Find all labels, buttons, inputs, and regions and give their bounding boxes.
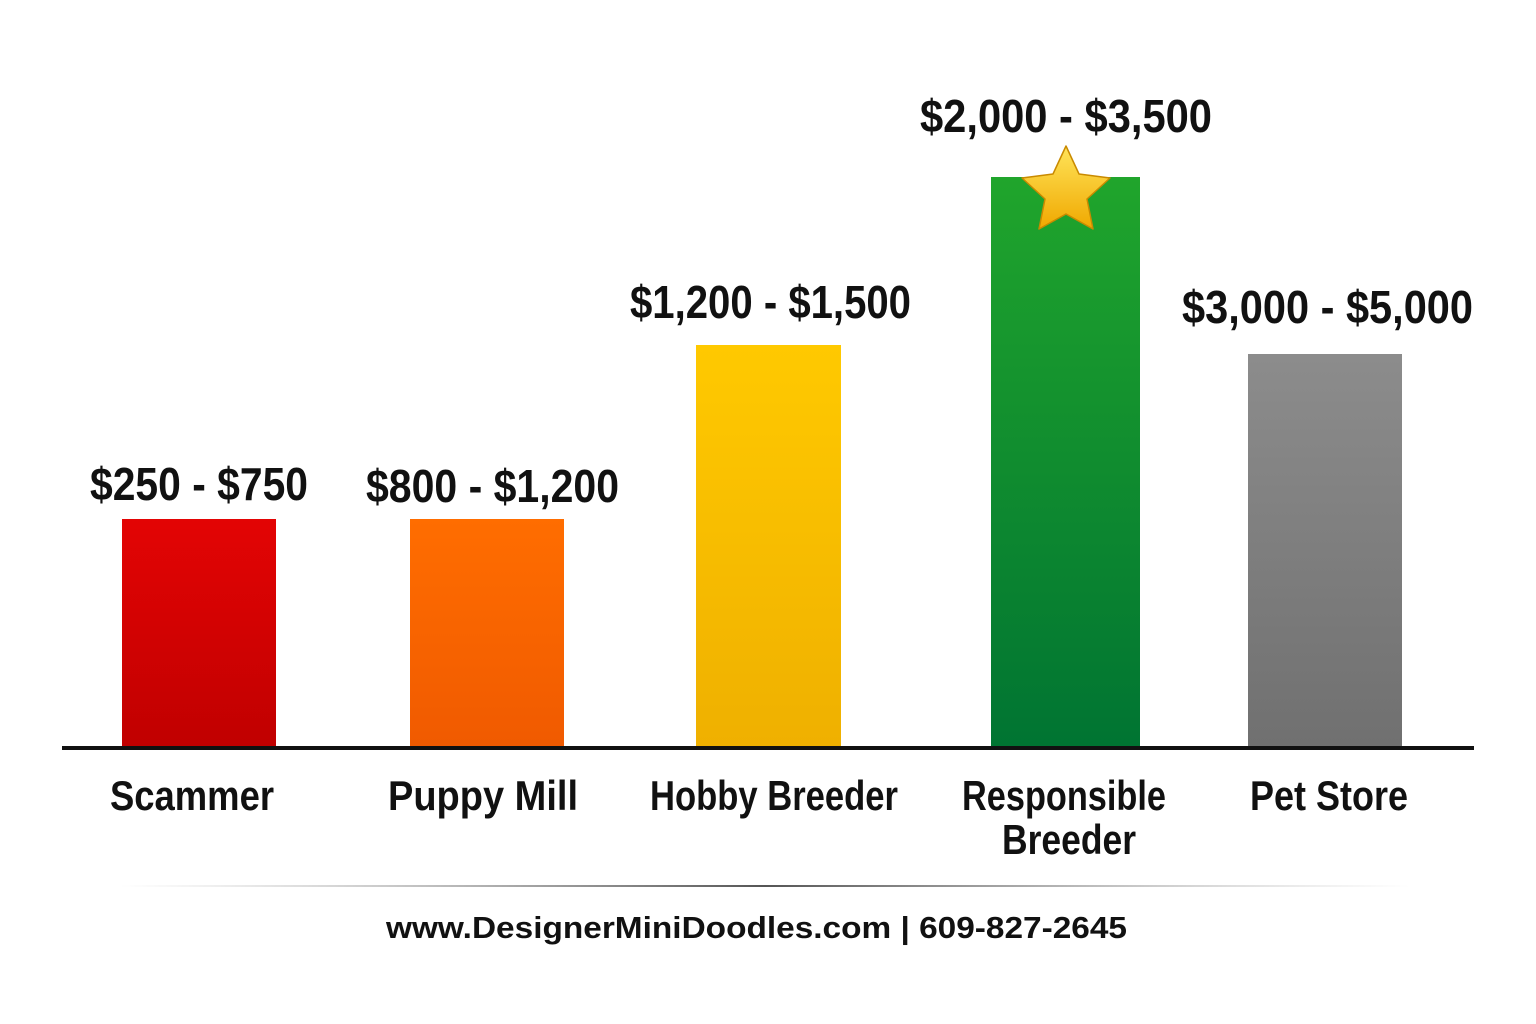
price label: scammer: $250 - $750	[90, 458, 308, 510]
bar: hobby breeder	[696, 345, 841, 748]
icon: star	[1022, 146, 1110, 229]
bar: responsible breeder	[991, 177, 1140, 748]
category label: hobby breeder: Hobby Breeder	[650, 772, 898, 819]
price label: responsible breeder: $2,000 - $3,500	[920, 90, 1212, 142]
price label: pet store: $3,000 - $5,000	[1182, 281, 1473, 333]
category label: puppy mill: Puppy Mill	[388, 772, 578, 819]
category label: responsible breeder: Breeder	[1002, 816, 1136, 863]
bar: scammer	[122, 519, 276, 748]
footer: website and phone: www.DesignerMiniDoodles.com | 609-827-2645	[385, 910, 1127, 945]
category label: responsible breeder: Responsible	[962, 772, 1166, 819]
bar: pet store	[1248, 354, 1402, 748]
category label: scammer: Scammer	[110, 772, 274, 819]
bar chart	[62, 90, 1474, 863]
price label: puppy mill: $800 - $1,200	[366, 460, 619, 512]
category label: pet store: Pet Store	[1250, 772, 1408, 819]
price label: hobby breeder: $1,200 - $1,500	[630, 276, 911, 328]
bar: puppy mill	[410, 519, 564, 748]
category label: responsible breeder	[962, 772, 1166, 863]
axis baseline	[62, 746, 1474, 750]
